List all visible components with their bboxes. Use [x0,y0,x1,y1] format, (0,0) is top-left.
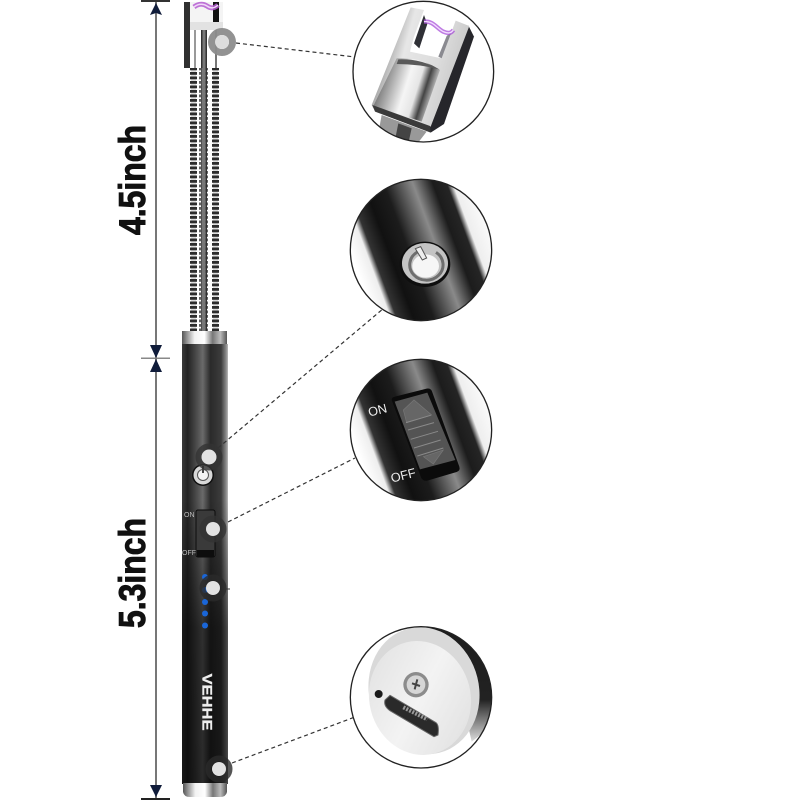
barrel [373,58,440,122]
lighter: flexible neck [190,30,219,332]
leader lines [218,43,384,763]
fork [372,7,469,127]
lighter: handle [182,331,228,797]
detail circle: power button [350,178,492,322]
purple spark [424,22,453,33]
switch slider [392,389,460,481]
OFF text: OFF [389,466,418,486]
brand name: VEHHE [200,674,216,730]
callout marker: LEDs [202,578,224,598]
screw [403,672,429,697]
purple arc [194,4,218,8]
lighter: electrode head [184,2,223,68]
black barrel side [426,628,491,742]
dark side of fork [427,25,474,133]
metal end cap [368,628,480,754]
indicator hole [375,690,383,698]
callout marker: electrode [212,32,232,52]
ON text: ON [367,401,388,420]
detail circle: electrode head [353,1,494,147]
callout marker: power button [198,446,220,468]
micro USB port [385,695,438,737]
detail circle: slide switch [350,358,492,502]
ON label: ON [184,512,194,519]
callout marker: port [208,758,230,780]
bottom collar [183,783,227,797]
callout marker: switch [202,518,224,540]
infographic: arc lighter dimensions and feature details [118,0,494,800]
neck [380,115,426,142]
top collar [182,331,227,344]
power button [192,464,214,486]
LED leader tick [226,588,230,590]
power switch [400,242,450,287]
detail circle: USB port [350,615,497,768]
battery LEDs [202,574,208,628]
label: 4.5inch: 4.5inch [112,125,153,235]
slide switch [196,510,215,557]
OFF label: OFF [182,550,196,557]
label: 5.3inch: 5.3inch [112,518,153,628]
dimension line: 5.3 inch [141,358,170,800]
dimension line: 4.5 inch [141,0,170,359]
